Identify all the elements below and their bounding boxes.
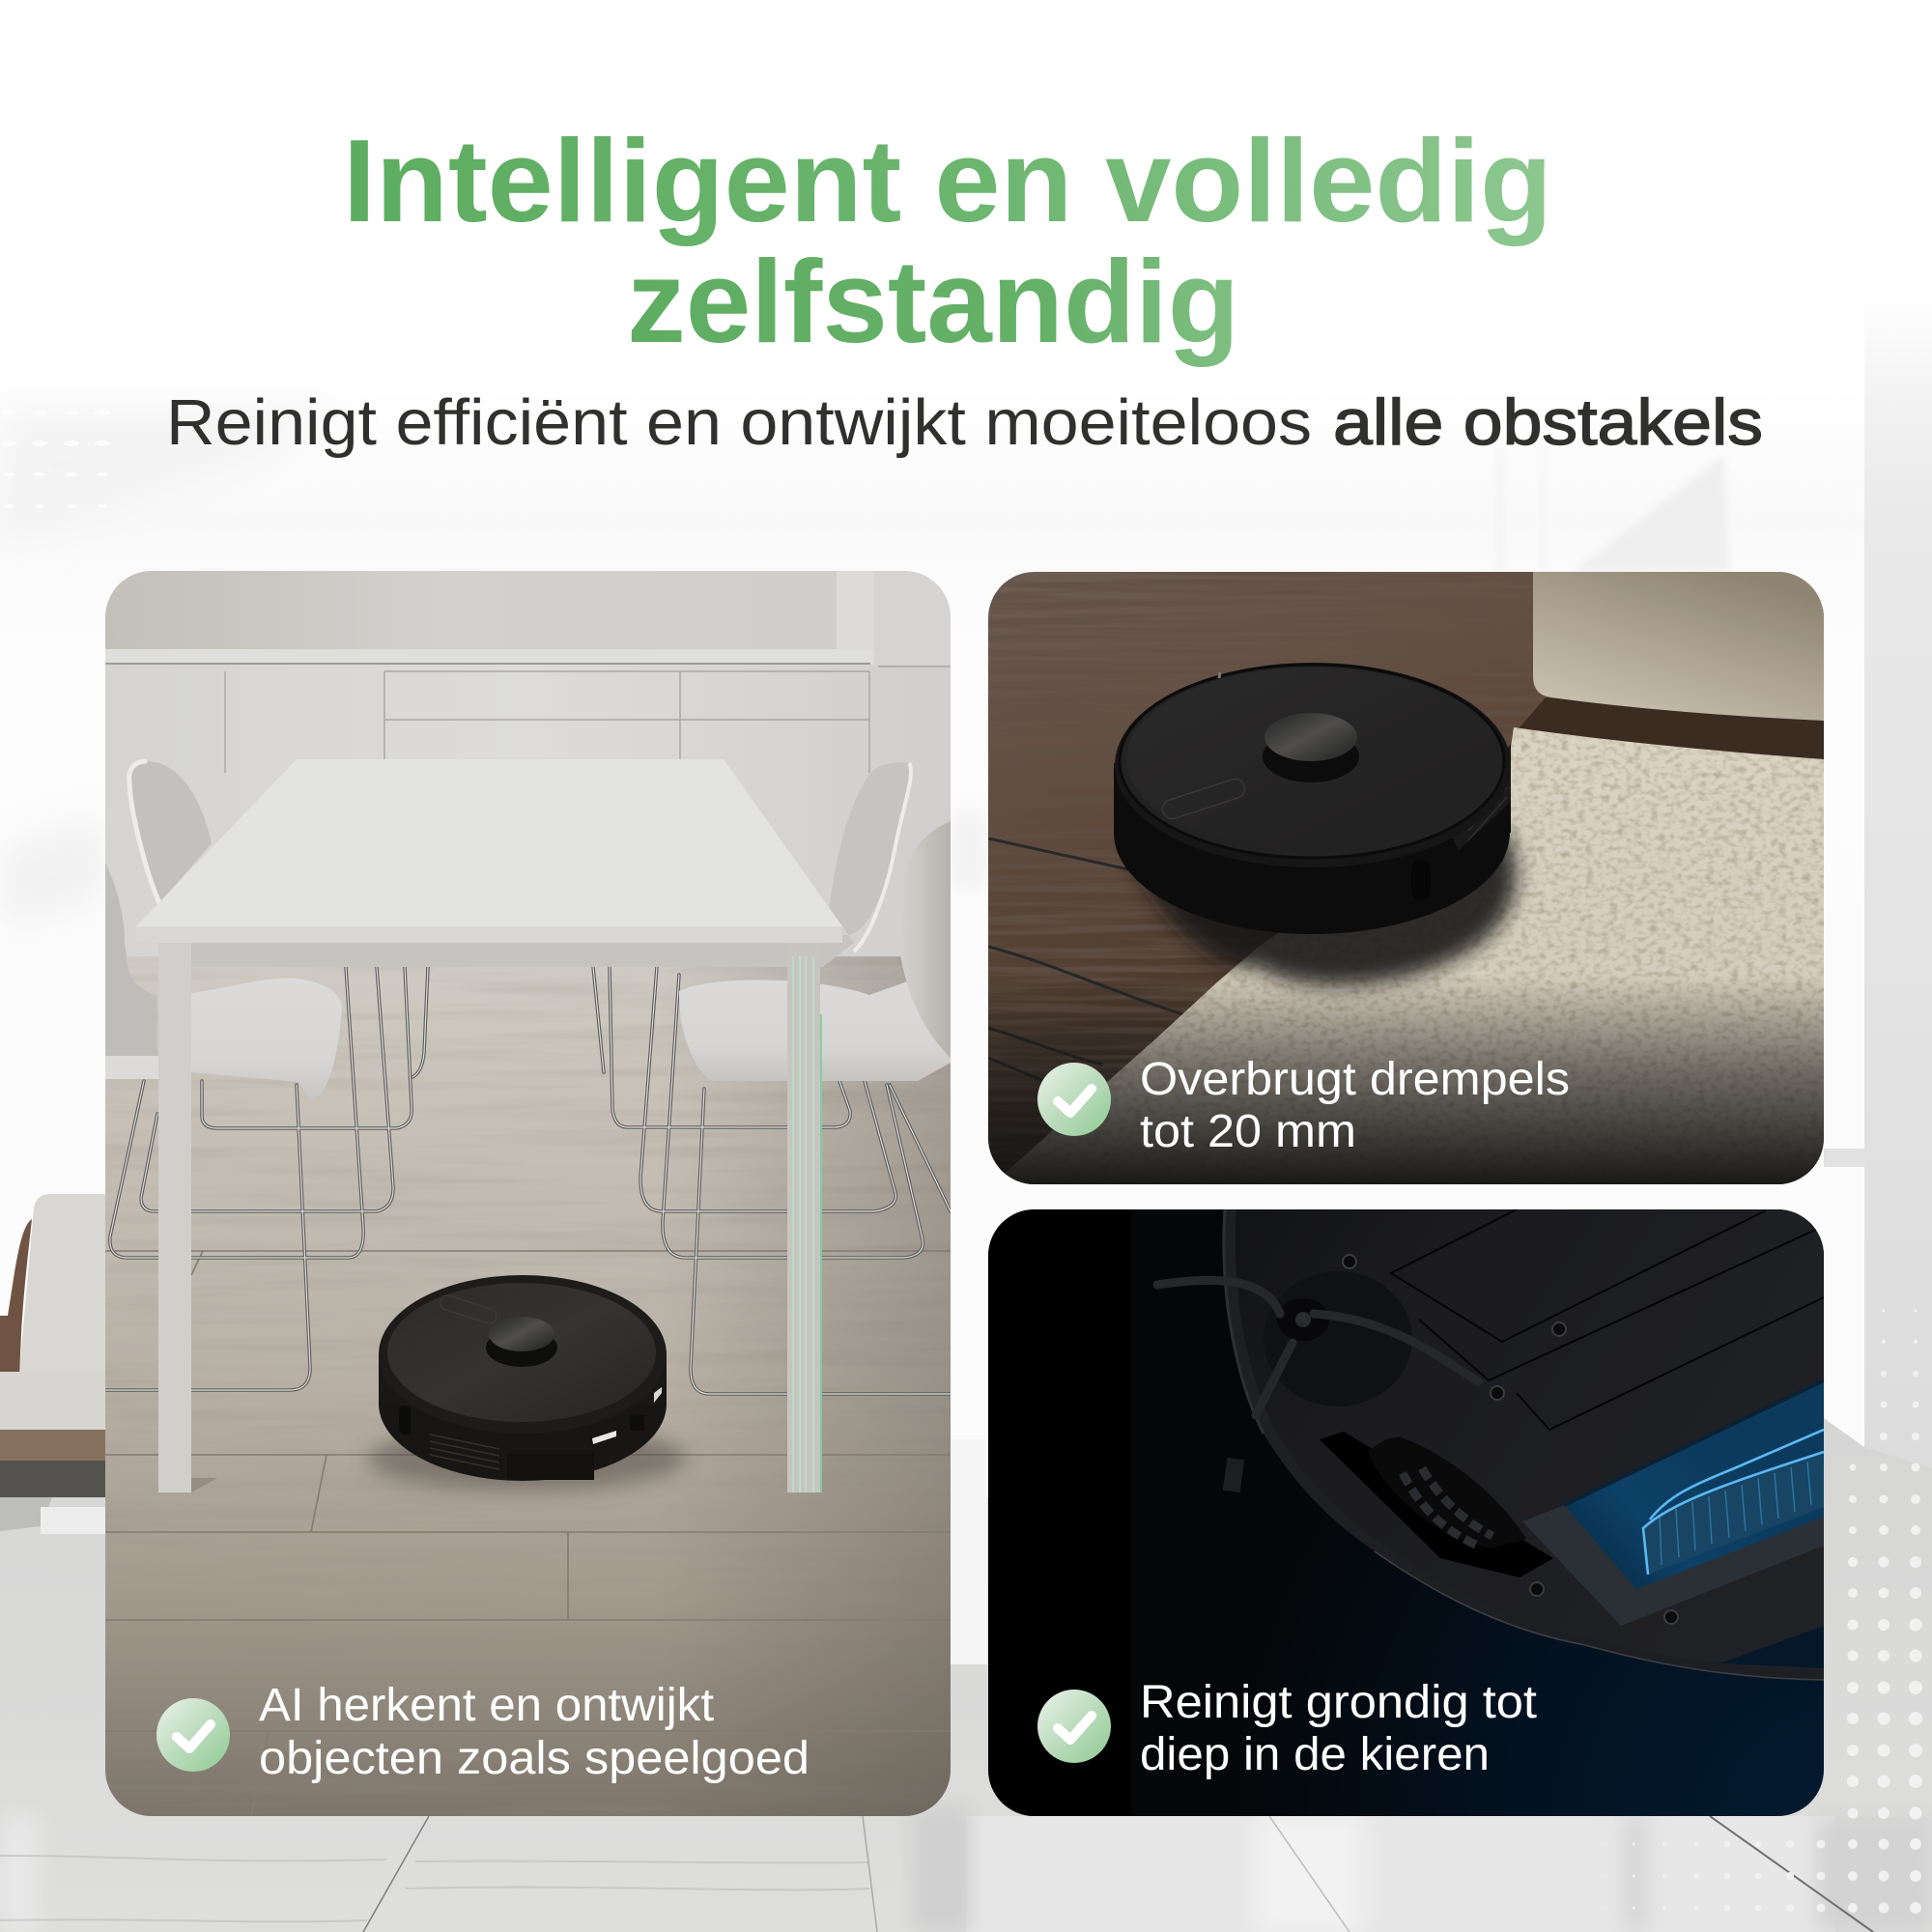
robot underside <box>1157 1209 1824 1680</box>
robot vacuum <box>367 1275 686 1492</box>
pouf <box>1533 572 1824 721</box>
blue dustbin <box>1564 1380 1824 1589</box>
dot pattern <box>1601 1310 1922 1914</box>
caption: deep clean <box>1037 1677 1537 1780</box>
grey frame <box>1522 1505 1824 1626</box>
caption: threshold <box>1037 1061 1569 1148</box>
rug <box>988 724 1824 1184</box>
panel: threshold climbing <box>988 572 1824 1184</box>
caption: AI: AI herkent en ontwijkt <box>259 1680 714 1731</box>
caption: threshold: tot 20 mm <box>1140 1106 1356 1157</box>
panel: deep cleaning underside <box>988 1209 1824 1816</box>
title <box>343 115 1552 367</box>
wheel <box>1368 1437 1526 1548</box>
check icon <box>156 1698 230 1772</box>
green scan lines on table leg <box>793 956 821 1492</box>
check icon <box>1037 1063 1111 1136</box>
caption: deep clean: Reinigt grondig tot <box>1140 1677 1537 1728</box>
title: zelfstandig <box>627 236 1239 367</box>
title: Intelligent en volledig <box>343 115 1552 246</box>
wooden floor <box>105 956 951 1816</box>
panel seams <box>1391 1209 1824 1430</box>
screws <box>1343 1255 1678 1624</box>
subtitle: Reinigt efficiënt en ontwijkt moeiteloos <box>166 386 1312 459</box>
subtitle <box>166 386 1763 459</box>
robot vacuum <box>1114 663 1511 934</box>
floor behind rug <box>1519 697 1824 759</box>
chairs <box>105 761 951 1394</box>
side brush <box>1264 1271 1412 1406</box>
sofa <box>0 1194 105 1534</box>
tile lines <box>363 1816 1873 1932</box>
subtitle: alle obstakels <box>1333 386 1763 459</box>
check icon <box>1037 1690 1111 1763</box>
caption: threshold: Overbrugt drempels <box>1140 1054 1570 1105</box>
wheel pit <box>1320 1432 1553 1577</box>
caption: AI <box>156 1680 810 1784</box>
caption: AI: objecten zoals speelgoed <box>259 1733 810 1784</box>
caption: deep clean: diep in de kieren <box>1140 1729 1490 1780</box>
table <box>136 759 842 1492</box>
panel: AI obstacle avoidance <box>105 571 951 1816</box>
robot shadow <box>1130 831 1517 985</box>
